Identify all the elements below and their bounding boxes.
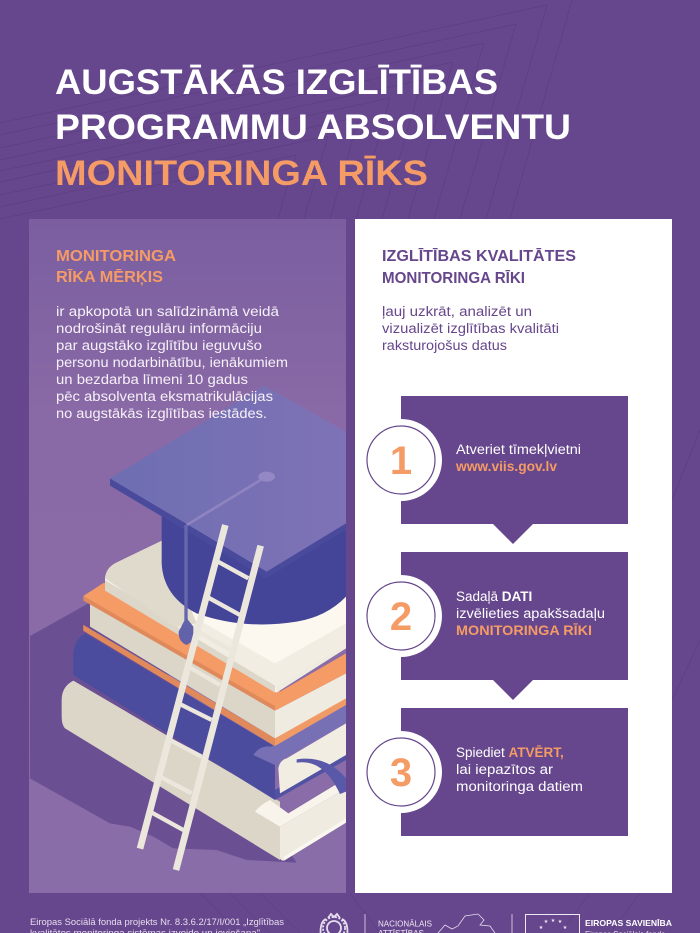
logo: national development plan: NACIONĀLAIS [378,918,432,928]
body text: quality monitoring tools [382,304,559,353]
step 2: Sadaļā DATI [456,589,532,604]
step 3: Spiediet ATVĒRT, [456,745,564,760]
panel: quality monitoring tools [355,219,672,893]
body text: tool purpose: ir apkopotā un salīdzināmā veidā [56,304,280,319]
body text: tool purpose: un bezdarba līmeni 10 gadus [56,372,248,387]
body text: quality monitoring tools: ļauj uzkrāt, analizēt un [382,304,532,319]
footer [30,914,672,933]
logo: European Union: ★ [544,919,549,925]
body text: tool purpose: pēc absolventa eksmatrikulācijas [56,389,273,404]
step 1: www.viis.gov.lv [455,459,557,474]
body text: quality monitoring tools: raksturojošus datus [382,338,507,353]
step 3: monitoringa datiem [456,779,583,794]
body text: tool purpose: personu nodarbinātību, ienākumiem [56,355,288,370]
title: AUGSTĀKĀS IZGLĪTĪBAS [55,63,498,102]
project text [30,917,284,933]
logo: European Union: ★ [563,925,568,931]
body text: quality monitoring tools: vizualizēt izglītības kvalitāti [382,321,559,336]
logo: national development plan [365,914,497,933]
body text: tool purpose: par augstāko izglītību ieguvušo [56,338,262,353]
step 1 [360,396,628,544]
logo: European Union [512,914,672,933]
heading: tool purpose: RĪKA MĒRĶIS [56,269,163,286]
panel: monitoring tool purpose [29,219,346,893]
step 2 [360,552,628,700]
heading: quality monitoring tools: IZGLĪTĪBAS KVALITĀTES [382,248,576,265]
body text: tool purpose: no augstākās izglītības iestādes. [56,406,267,421]
logo: coat of arms [321,914,347,933]
heading: quality monitoring tools [382,248,576,287]
heading: tool purpose: MONITORINGA [56,248,176,265]
step 2: MONITORINGA RĪKI [456,623,592,638]
step 1: Atveriet tīmekļvietni [456,442,581,457]
body text: tool purpose [56,304,288,421]
logo: European Union: ★ [539,925,544,931]
step 2: izvēlieties apakšsadaļu [456,606,605,621]
step 3 [360,708,628,836]
heading: quality monitoring tools: MONITORINGA RĪKI [382,270,525,287]
logo: European Union: ★ [558,919,563,925]
title: PROGRAMMU ABSOLVENTU [55,108,571,147]
step 3: lai iepazītos ar [456,762,554,777]
step 3: 3 [390,751,412,795]
logo: European Union: EIROPAS SAVIENĪBA [585,918,672,928]
project text: Eiropas Sociālā fonda projekts Nr. 8.3.6.2/17/I/001 „Izglītības [30,917,284,928]
title: MONITORINGA RĪKS [55,154,428,193]
logo: European Union: ★ [551,918,556,924]
step 1: 1 [390,439,412,483]
title [55,63,571,193]
illustration: books, graduation cap and ladder [30,386,346,870]
step 2: 2 [390,595,412,639]
heading: tool purpose [56,248,176,286]
body text: tool purpose: nodrošināt regulāru informāciju [56,321,262,336]
